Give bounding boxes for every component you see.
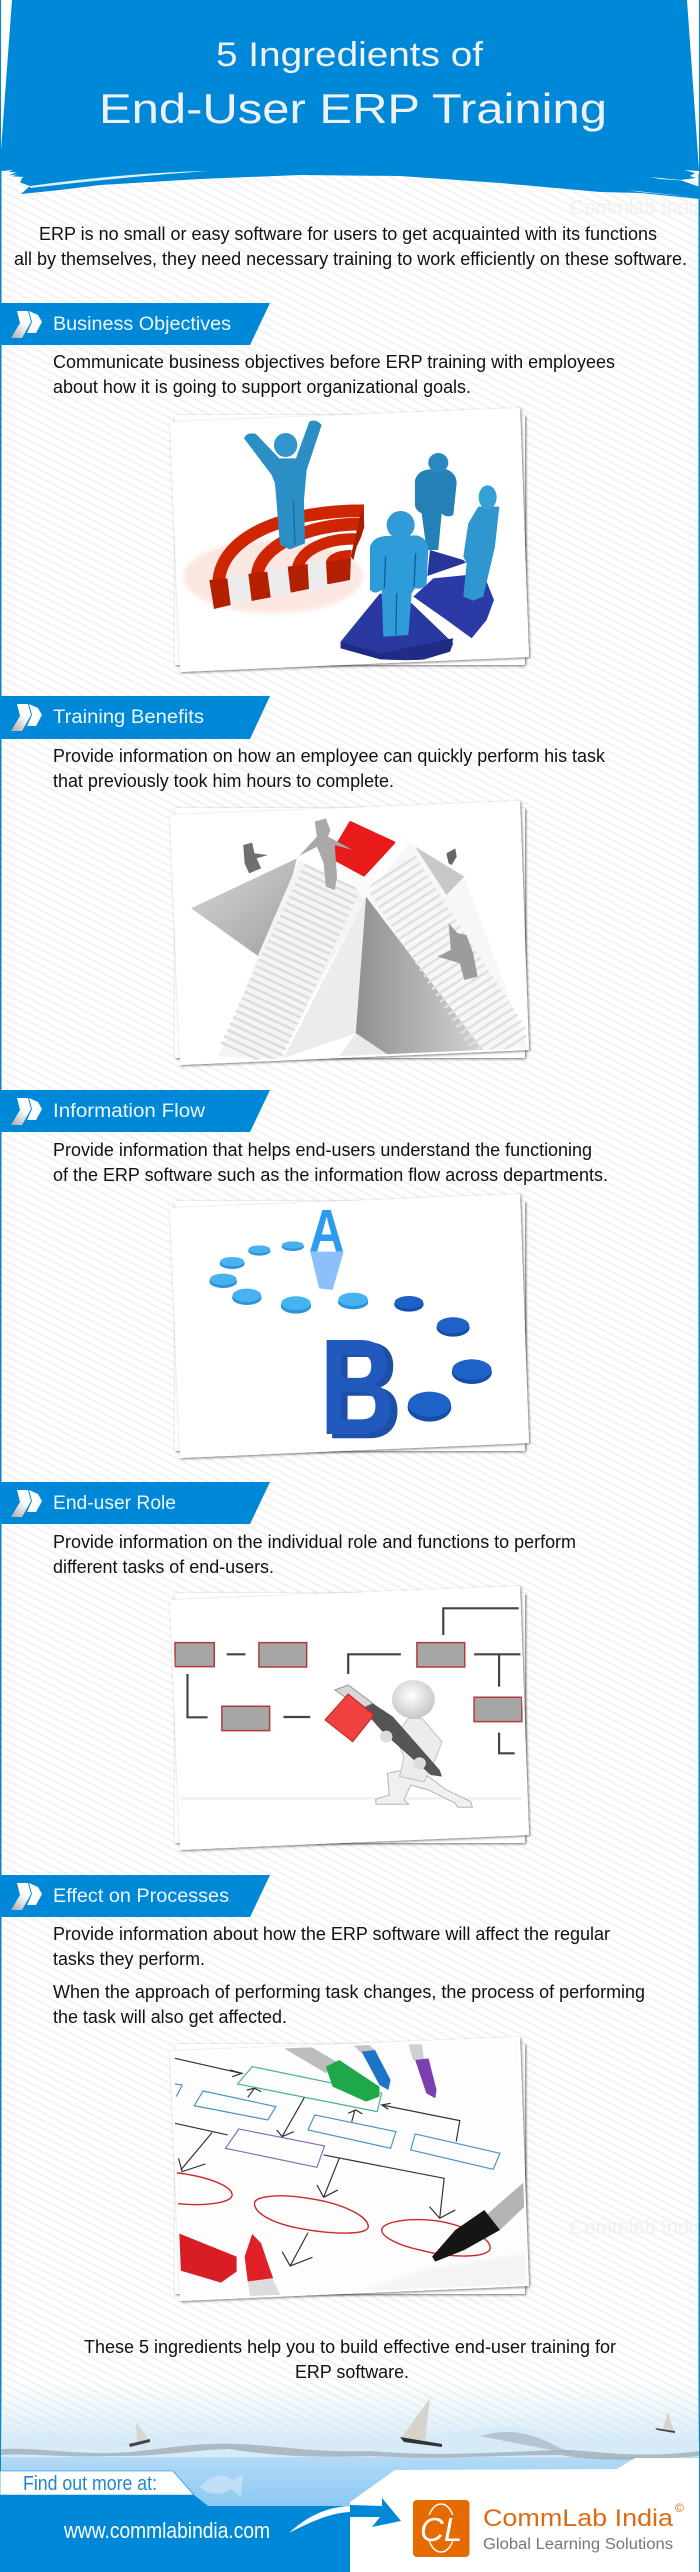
intro text <box>14 224 687 269</box>
body text: When the approach of performing task changes, the process of performing <box>53 1982 645 2002</box>
body text <box>53 746 606 791</box>
title: End-User ERP Training <box>99 85 607 132</box>
body text <box>53 1140 608 1185</box>
section 3: information flow <box>0 1090 608 1469</box>
body text <box>53 352 615 397</box>
intro text: ERP is no small or easy software for users to get acquainted with its functions <box>39 224 657 244</box>
section 2: training benefits <box>0 696 606 1065</box>
body text: different tasks of end-users. <box>53 1557 274 1577</box>
body text: the task will also get affected. <box>53 2007 287 2027</box>
heading bar <box>0 1090 270 1132</box>
body text: that previously took him hours to complete. <box>53 771 394 791</box>
watermarks <box>570 197 700 2239</box>
heading bar <box>0 696 270 739</box>
fish <box>200 2475 243 2497</box>
sailboat: middle <box>400 2398 442 2447</box>
section 1: business objectives <box>0 303 615 672</box>
photo: A to B path: B <box>325 1313 402 1469</box>
blue url panel <box>0 2495 350 2572</box>
logo wordmark: © <box>675 2501 684 2515</box>
body text: Provide information on the individual role and functions to perform <box>53 1532 576 1552</box>
body text: Provide information about how the ERP software will affect the regular <box>53 1924 610 1944</box>
photo: people on charts <box>170 408 529 672</box>
icon: arrow <box>289 2498 401 2533</box>
logo <box>413 2500 684 2557</box>
footer <box>0 2458 699 2572</box>
title: 5 Ingredients of <box>216 36 484 74</box>
body text: about how it is going to support organizational goals. <box>53 377 471 397</box>
logo mark: CL <box>420 2511 462 2548</box>
logo wordmark <box>483 2501 684 2553</box>
photo: A to B path: A <box>309 1197 344 1265</box>
website url: www.commlabindia.com <box>63 2518 270 2543</box>
heading bar: Business Objectives <box>53 314 231 335</box>
photo: flowchart with markers <box>170 2037 536 2301</box>
body text: Communicate business objectives before ERP training with employees <box>53 352 615 372</box>
body text: tasks they perform. <box>53 1949 205 1969</box>
heading bar <box>0 1875 270 1917</box>
heading bar <box>0 1482 270 1524</box>
closing text <box>84 2337 616 2382</box>
photo: A to B path: B <box>320 1311 395 1463</box>
photo: A to B path <box>170 1194 529 1469</box>
sailboat: right <box>655 2412 675 2433</box>
heading bar <box>0 303 270 345</box>
photo: stairs <box>170 801 529 1065</box>
heading bar: Effect on Processes <box>53 1886 229 1907</box>
body text: Provide information on how an employee can quickly perform his task <box>53 746 606 766</box>
section 4: end-user role <box>0 1482 576 1850</box>
header banner <box>0 0 700 199</box>
intro text: all by themselves, they need necessary training to work efficiently on these software. <box>14 249 687 269</box>
closing text: ERP software. <box>295 2362 409 2382</box>
sailboat: left <box>129 2422 150 2447</box>
section 5: effect on processes <box>0 1875 645 2301</box>
white logo panel <box>350 2458 699 2572</box>
body text: of the ERP software such as the information flow across departments. <box>53 1165 608 1185</box>
logo wordmark: Global Learning Solutions <box>483 2536 673 2553</box>
logo wordmark: CommLab India <box>483 2505 674 2532</box>
logo mark <box>413 2500 470 2557</box>
body text: Provide information that helps end-users understand the functioning <box>53 1140 592 1160</box>
heading bar: End-user Role <box>53 1493 176 1514</box>
title <box>99 36 607 132</box>
body text <box>53 1532 576 1577</box>
closing text: These 5 ingredients help you to build effective end-user training for <box>84 2337 616 2357</box>
heading bar: Training Benefits <box>53 707 204 728</box>
waves <box>1 2427 699 2517</box>
sea scene <box>1 2385 699 2517</box>
find out more tag: Find out more at: <box>23 2473 157 2495</box>
photo: figure with wrench <box>170 1586 529 1850</box>
heading bar: Information Flow <box>53 1101 205 1122</box>
body text <box>53 1924 645 2027</box>
